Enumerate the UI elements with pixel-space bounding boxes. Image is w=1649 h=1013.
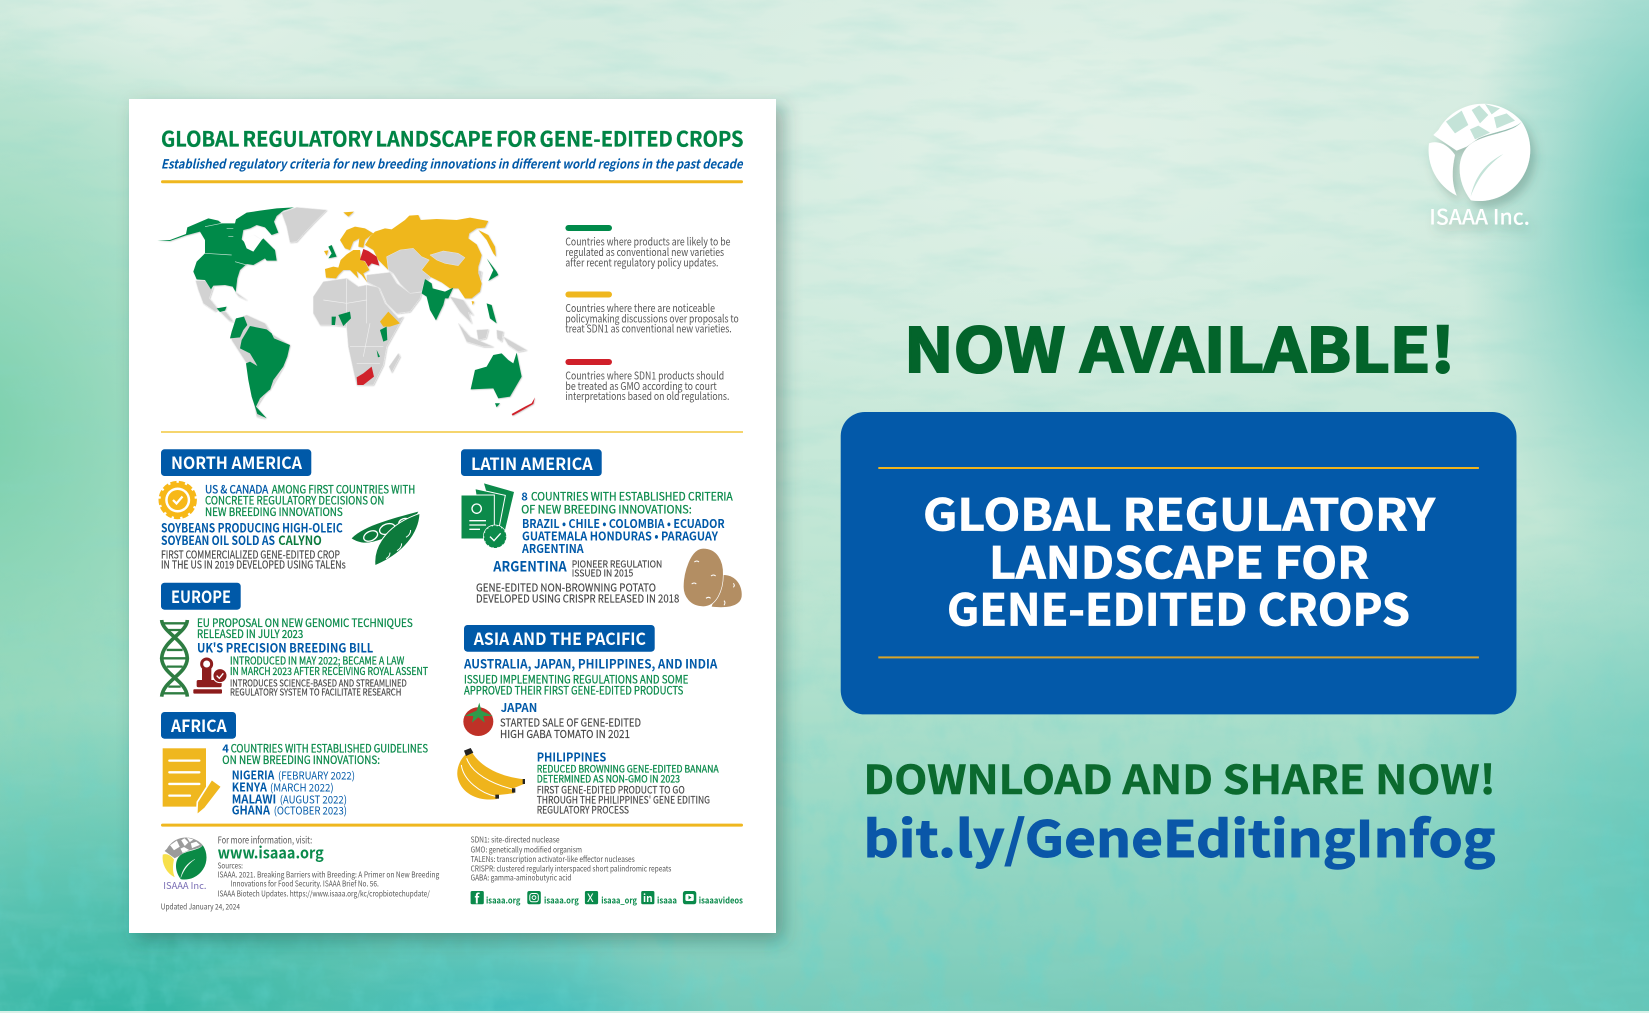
call to action bbox=[864, 748, 1496, 872]
text: eight countries: 8 bbox=[521, 489, 528, 505]
logo: white ISAAA mark: ISAAA Inc. bbox=[1429, 201, 1530, 231]
footer: social media links: isaaavideos bbox=[699, 895, 743, 907]
call to action: bit.ly/GeneEditingInfog bbox=[864, 800, 1496, 872]
text: soybeans: FIRST COMMERCIALIZED GENE-EDITED CROP bbox=[161, 546, 340, 561]
panel: Latin America: LATIN AMERICA bbox=[471, 450, 593, 475]
text: soybeans bbox=[161, 518, 346, 572]
text: UK bill: INTRODUCES SCIENCE-BASED AND STREAMLINED bbox=[230, 675, 407, 689]
legend: conventional bbox=[565, 225, 730, 271]
footer: glossary: SDN1: site-directed nuclease bbox=[471, 835, 560, 846]
text: Argentina: DEVELOPED USING CRISPR RELEASED IN 2018 bbox=[476, 591, 679, 607]
text: UK bill: INTRODUCED IN MAY 2022; BECAME A LAW bbox=[230, 653, 404, 668]
text: countries with regulations bbox=[463, 654, 718, 698]
text: Argentina: ARGENTINA bbox=[492, 556, 567, 577]
logo: white ISAAA mark bbox=[1429, 104, 1530, 231]
text: UK bill: UK'S PRECISION BREEDING BILL bbox=[197, 637, 374, 656]
list: African countries: (AUGUST 2022) bbox=[280, 792, 347, 807]
list: African countries: KENYA bbox=[232, 777, 267, 795]
text: guidelines: COUNTRIES WITH ESTABLISHED GUIDELINES bbox=[231, 741, 428, 757]
list: African countries: (FEBRUARY 2022) bbox=[278, 769, 355, 784]
footer: website and sources: ISAAA Biotech Updates. https://www.isaaa.org/kc/cropbiotechupdate/ bbox=[218, 888, 430, 899]
footer: social media links: isaaa_org bbox=[601, 895, 637, 907]
footer logo: ISAAA: ISAAA Inc. bbox=[163, 878, 206, 892]
list: African countries: MALAWI bbox=[232, 789, 276, 807]
text: eight countries: ARGENTINA bbox=[521, 539, 584, 557]
text: Japan: JAPAN bbox=[501, 698, 537, 716]
text: UK bill bbox=[197, 637, 428, 698]
icon: stamp bbox=[193, 659, 227, 694]
text: US and Canada: CONCRETE REGULATORY DECISIONS ON bbox=[205, 493, 384, 509]
text: Japan bbox=[500, 698, 641, 742]
footer: website and sources: Sources: bbox=[218, 861, 243, 872]
footer: social media links: isaaa bbox=[657, 895, 677, 907]
panel: Europe: EUROPE bbox=[171, 583, 231, 608]
text: soybeans: SOYBEAN OIL SOLD AS bbox=[161, 531, 275, 549]
icon: potatoes bbox=[683, 548, 742, 607]
text: US and Canada: US & CANADA bbox=[205, 481, 268, 497]
icon: DNA helix bbox=[162, 620, 187, 697]
text: UK bill: IN MARCH 2023 AFTER RECEIVING ROYAL ASSENT bbox=[230, 664, 428, 679]
footer: social media links bbox=[471, 888, 743, 908]
legend: policymaking discussions: treat SDN1 as conventional new varieties. bbox=[565, 321, 732, 336]
text: guidelines bbox=[222, 741, 428, 768]
list: African countries bbox=[232, 766, 355, 818]
footer: social media links: isaaa.org bbox=[544, 895, 579, 907]
panel: Europe bbox=[161, 583, 428, 698]
footer: website and sources bbox=[161, 832, 440, 913]
legend: conventional: Countries where products are likely to be bbox=[565, 235, 730, 250]
poster panel: infographic sheet bbox=[129, 99, 776, 933]
panel: Asia and the Pacific bbox=[457, 625, 719, 816]
list: African countries: NIGERIA bbox=[232, 766, 274, 784]
text: eight countries: COUNTRIES WITH ESTABLISHED CRITERIA bbox=[531, 489, 733, 505]
text: Argentina: PIONEER REGULATION bbox=[572, 556, 662, 570]
panel: title card: LANDSCAPE FOR bbox=[989, 527, 1369, 591]
text: guidelines: 4 bbox=[222, 741, 229, 757]
panel: North America bbox=[160, 449, 420, 572]
panel: Africa bbox=[161, 712, 428, 818]
legend: conventional: after recent regulatory policy updates. bbox=[565, 256, 718, 271]
legend: treated as GMO: be treated as GMO according to court bbox=[565, 379, 717, 394]
footer: glossary: TALENs: transcription activator-like effector nucleases bbox=[471, 854, 635, 865]
panel: title card: GLOBAL REGULATORY bbox=[923, 480, 1436, 544]
text: EU proposal bbox=[197, 615, 413, 642]
footer: glossary bbox=[471, 835, 672, 884]
text: guidelines: ON NEW BREEDING INNOVATIONS: bbox=[222, 752, 380, 768]
footer: social media links: f bbox=[474, 888, 480, 908]
text: Japan: STARTED SALE OF GENE-EDITED bbox=[500, 715, 641, 731]
text: eight countries: OF NEW BREEDING INNOVATIONS: bbox=[521, 501, 692, 517]
footer: website and sources: Updated January 24, 2024 bbox=[161, 902, 241, 913]
call to action: DOWNLOAD AND SHARE NOW! bbox=[864, 748, 1496, 806]
icon: tomato bbox=[463, 703, 493, 736]
panel: title card: GENE-EDITED CROPS bbox=[947, 575, 1410, 639]
text: EU proposal: RELEASED IN JULY 2023 bbox=[197, 626, 303, 642]
text: countries with regulations: APPROVED THEIR FIRST GENE-EDITED PRODUCTS bbox=[464, 682, 684, 698]
text: Argentina bbox=[476, 556, 679, 607]
icon: soybean pods bbox=[352, 512, 420, 566]
legend: conventional: regulated as conventional new varieties bbox=[565, 245, 724, 260]
list: African countries: GHANA bbox=[232, 800, 270, 818]
footer: website and sources: www.isaaa.org bbox=[218, 841, 324, 863]
panel: Asia and the Pacific: ASIA AND THE PACIFIC bbox=[473, 625, 646, 650]
text: eight countries: BRAZIL • CHILE • COLOMBIA • ECUADOR bbox=[522, 514, 725, 532]
legend: policymaking discussions bbox=[565, 292, 739, 336]
text: countries with regulations: ISSUED IMPLEMENTING REGULATIONS AND SOME bbox=[464, 671, 688, 687]
text: US and Canada: AMONG FIRST COUNTRIES WITH bbox=[272, 481, 415, 497]
footer: social media links: in bbox=[643, 891, 653, 906]
text: soybeans: IN THE US IN 2019 DEVELOPED USING TALENs bbox=[161, 557, 346, 572]
text: Philippines: FIRST GENE-EDITED PRODUCT TO GO bbox=[537, 781, 685, 796]
text: US and Canada: NEW BREEDING INNOVATIONS bbox=[205, 504, 343, 520]
footer: glossary: CRISPR: clustered regularly interspaced short palindromic repeats bbox=[471, 864, 672, 875]
text: Philippines: DETERMINED AS NON-GMO IN 2023 bbox=[537, 771, 680, 786]
legend: treated as GMO: Countries where SDN1 products should bbox=[565, 369, 724, 384]
panel: North America: NORTH AMERICA bbox=[171, 449, 302, 474]
world map bbox=[157, 207, 535, 418]
text: Philippines: PHILIPPINES bbox=[537, 747, 607, 765]
text: Argentina: GENE-EDITED NON-BROWNING POTATO bbox=[476, 579, 656, 595]
text: UK bill: REGULATORY SYSTEM TO FACILITATE RESEARCH bbox=[230, 684, 401, 698]
footer: website and sources: Innovations for Food Security. ISAAA Brief No. 56. bbox=[231, 879, 379, 890]
text: soybeans: SOYBEANS PRODUCING HIGH-OLEIC bbox=[161, 518, 343, 536]
footer: social media links: X bbox=[587, 890, 594, 906]
footer: glossary: GABA: gamma-aminobutyric acid bbox=[471, 873, 572, 884]
text: Philippines bbox=[537, 747, 719, 816]
legend: policymaking discussions: policymaking discussions over proposals to bbox=[565, 311, 739, 326]
text: countries with regulations: AUSTRALIA, JAPAN, PHILIPPINES, AND INDIA bbox=[463, 654, 718, 673]
text: Philippines: REDUCED BROWNING GENE-EDITED BANANA bbox=[537, 760, 719, 775]
text: Philippines: REGULATORY PROCESS bbox=[537, 801, 629, 816]
footer: social media links: isaaa.org bbox=[486, 895, 520, 907]
footer logo: ISAAA bbox=[163, 838, 207, 892]
list: African countries: (MARCH 2022) bbox=[270, 780, 334, 795]
panel: title card bbox=[841, 412, 1516, 714]
text: soybeans: CALYNO bbox=[278, 531, 322, 549]
legend: treated as GMO bbox=[565, 359, 729, 404]
list: African countries: (OCTOBER 2023) bbox=[274, 803, 347, 818]
panel: Latin America bbox=[461, 449, 742, 607]
text: eight countries: GUATEMALA HONDURAS • PARAGUAY bbox=[522, 527, 719, 545]
text: Japan: HIGH GABA TOMATO IN 2021 bbox=[500, 726, 630, 742]
title: GLOBAL REGULATORY LANDSCAPE FOR GENE-EDITED CROPS bbox=[161, 123, 744, 153]
footer: website and sources: For more information, visit: bbox=[218, 832, 312, 846]
text: eight countries bbox=[521, 489, 733, 557]
footer: glossary: GMO: genetically modified organism bbox=[471, 844, 582, 855]
icon: certified documents bbox=[461, 483, 514, 548]
text: Argentina: ISSUED IN 2015 bbox=[572, 566, 633, 580]
footer: website and sources: ISAAA. 2021. Breaking Barriers with Breeding: A Primer on New Breeding bbox=[218, 870, 440, 881]
legend: policymaking discussions: Countries where there are noticeable bbox=[565, 301, 715, 316]
icon: document with pencil bbox=[163, 748, 222, 815]
text: Philippines: THROUGH THE PHILIPPINES' GENE EDITING bbox=[537, 791, 710, 806]
legend: treated as GMO: interpretations based on old regulations. bbox=[565, 389, 729, 404]
subtitle: Established regulatory criteria for new breeding innovations in different world regions in the past decade bbox=[161, 153, 744, 172]
icon: bananas bbox=[457, 748, 525, 800]
icon: approval badge bbox=[160, 483, 195, 517]
headline: now available: NOW AVAILABLE! bbox=[904, 301, 1455, 390]
text: US and Canada bbox=[205, 481, 415, 520]
text: EU proposal: EU PROPOSAL ON NEW GENOMIC TECHNIQUES bbox=[197, 615, 413, 631]
panel: Africa: AFRICA bbox=[170, 712, 227, 737]
